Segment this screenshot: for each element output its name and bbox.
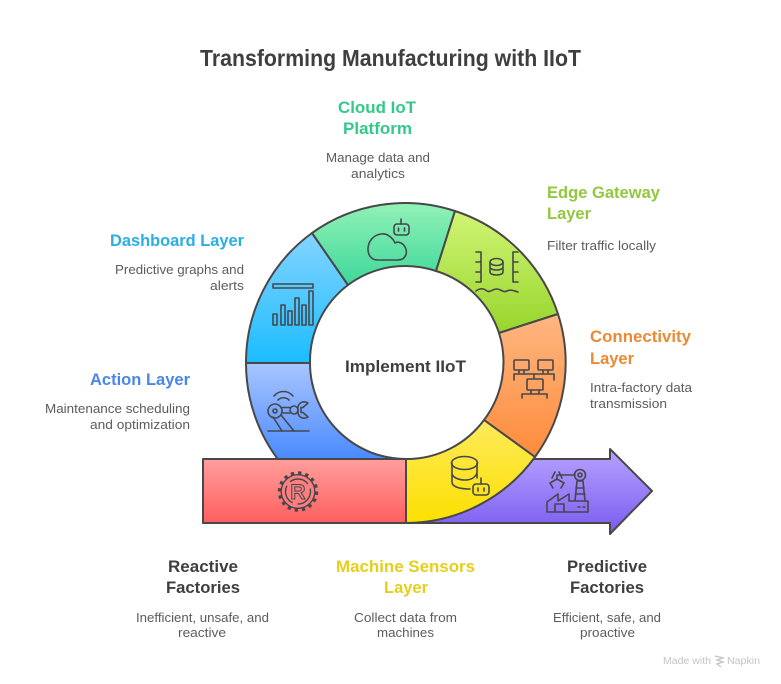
icon: cloud with robot [368, 219, 409, 260]
label: reactive factories: Reactive [168, 557, 238, 576]
label: action layer: Action Layer [90, 370, 190, 389]
label: action layer [45, 370, 190, 432]
ring segment: action layer [246, 363, 406, 462]
label: connectivity layer: transmission [590, 397, 667, 411]
watermark [663, 656, 760, 667]
ring segment: edge gateway layer [436, 211, 558, 333]
watermark: Napkin [727, 656, 760, 667]
label: dashboard layer [110, 231, 244, 293]
label: edge gateway layer: Edge Gateway [547, 183, 661, 202]
ring segment: cloud iot platform [312, 203, 455, 285]
icon: napkin logo [715, 656, 723, 667]
label: cloud iot platform: Manage data and [326, 151, 430, 165]
label: dashboard layer: Predictive graphs and [115, 263, 244, 277]
icon: R gear: R [290, 481, 306, 504]
label: reactive factories [136, 557, 269, 640]
label: connectivity layer: Layer [590, 349, 634, 368]
label: machine sensors layer: Layer [384, 578, 428, 597]
arrow: predictive factories [406, 449, 652, 534]
ring segment: dashboard layer [246, 233, 348, 363]
label: edge gateway layer: Filter traffic locally [547, 239, 657, 253]
label: cloud iot platform: analytics [351, 167, 405, 181]
label: action layer: and optimization [90, 418, 190, 432]
icon: networked monitors [514, 360, 554, 398]
label: predictive factories: proactive [580, 626, 635, 640]
icon: gateway database [476, 252, 518, 292]
label: cloud iot platform: Platform [343, 119, 412, 138]
label: predictive factories: Efficient, safe, and [553, 611, 661, 625]
label: predictive factories: Predictive [567, 557, 647, 576]
icon: smart factory [547, 470, 588, 512]
label: predictive factories: Factories [570, 578, 644, 597]
label: machine sensors layer: Collect data from [354, 611, 457, 625]
label: edge gateway layer [547, 183, 661, 253]
ring segment: machine sensors layer [406, 420, 535, 523]
label: connectivity layer: Connectivity [590, 327, 692, 346]
label: connectivity layer: Intra-factory data [590, 381, 692, 395]
label: reactive factories: Inefficient, unsafe, and [136, 611, 269, 625]
label: machine sensors layer: Machine Sensors [336, 557, 475, 576]
ring segment: connectivity layer [484, 314, 566, 457]
label: dashboard layer: alerts [210, 279, 244, 293]
label: edge gateway layer: Layer [547, 204, 591, 223]
bar: reactive factories [203, 459, 406, 523]
label: machine sensors layer [336, 557, 475, 640]
label: cloud iot platform [326, 98, 430, 181]
label: cloud iot platform: Cloud IoT [338, 98, 417, 117]
label: action layer: Maintenance scheduling [45, 402, 190, 416]
center label: Implement IIoT [345, 357, 467, 376]
label: reactive factories: Factories [166, 578, 240, 597]
icon: database with robot [452, 456, 489, 495]
title: Transforming Manufacturing with IIoT [200, 45, 581, 71]
label: connectivity layer [590, 327, 692, 411]
icon: bar chart [273, 284, 313, 325]
label: reactive factories: reactive [178, 626, 226, 640]
label: machine sensors layer: machines [377, 626, 434, 640]
icon: robot arm [268, 392, 309, 431]
label: predictive factories [553, 557, 661, 640]
label: dashboard layer: Dashboard Layer [110, 231, 244, 250]
watermark: Made with [663, 656, 711, 667]
icon: R gear [280, 473, 316, 510]
